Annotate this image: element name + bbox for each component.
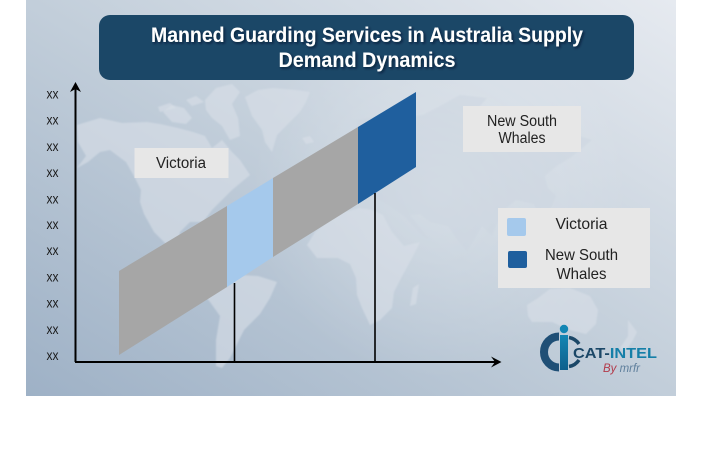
logo: CAT-INTEL by mrfr [544,325,657,375]
title second line: Demand Dynamics [278,49,456,72]
title text: Manned Guarding Services in Australia Supply [151,24,583,47]
segment: New South Whales [358,92,416,204]
logo mark [544,325,579,370]
title banner [99,15,634,80]
y axis labels: xx [46,268,58,284]
callout: Victoria [134,148,228,178]
y axis labels: xx [46,190,58,206]
callout: New South Whales: New South [487,113,557,130]
y axis labels: xx [46,242,58,258]
y axis labels: xx [46,112,58,128]
callout: Victoria: Victoria [156,155,206,172]
x axis arrow [75,356,502,368]
background panel [26,0,676,396]
y axis labels: xx [46,216,58,232]
callout: New South Whales: Whales [498,130,546,147]
legend label: New South Whales: New South [545,247,618,264]
legend label: New South Whales [545,247,618,283]
legend swatch: Victoria [507,218,526,236]
legend [498,208,650,288]
marker line: Victoria [234,283,236,362]
marker line: New South Whales [374,193,376,362]
y axis labels: xx [46,294,58,310]
legend label: New South Whales: Whales [556,266,606,283]
y axis labels: xx [46,347,58,363]
logo wordmark: CAT-INTEL [573,345,657,362]
y axis labels: xx [46,164,58,180]
y axis labels [46,86,58,363]
world map: Americas, Africa and Oceania [77,84,637,368]
logo byline: By mrfr [603,361,641,375]
segment: grey middle [273,127,358,257]
segment: Victoria [227,178,273,287]
band chart [119,92,416,355]
y axis arrow [70,82,81,362]
y axis labels: xx [46,86,58,102]
callout: New South Whales [463,106,581,152]
world map: Eurasia [350,95,592,252]
y axis labels: xx [46,138,58,154]
y axis labels: xx [46,321,58,337]
legend label: Victoria: Victoria [556,216,608,233]
segment: grey left [119,206,227,355]
legend swatch: New South Whales [508,251,527,268]
